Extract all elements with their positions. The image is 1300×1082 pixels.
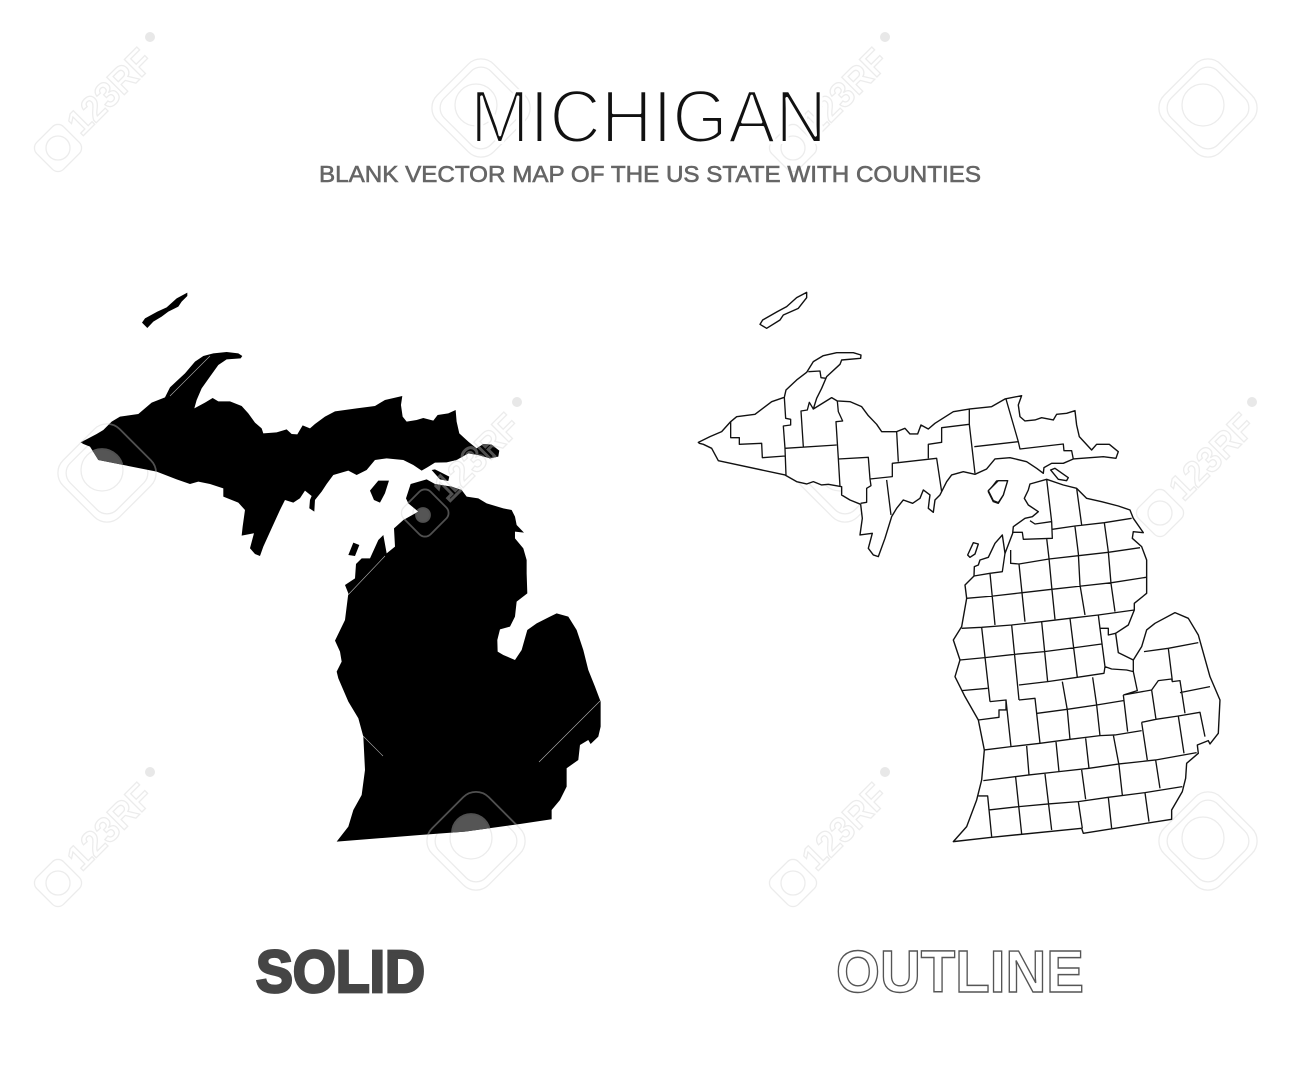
watermark over solid map [80, 356, 600, 834]
watermark over solid map: 123RF [425, 405, 528, 508]
solid map of Michigan [81, 293, 601, 842]
label: outline: OUTLINE [836, 939, 1084, 1005]
outline map of Michigan with counties [698, 292, 1220, 842]
subtitle: BLANK VECTOR MAP OF THE US STATE WITH COUNTIES [319, 161, 981, 187]
watermark layer [31, 32, 1265, 910]
outline: upper peninsula counties and islands [698, 292, 1118, 557]
watermark layer: 123RF [793, 40, 896, 143]
solid: lower peninsula [335, 479, 601, 842]
watermark layer: 123RF [58, 40, 161, 143]
watermark layer: 123RF [1160, 405, 1263, 508]
outline: lower peninsula counties [953, 479, 1220, 842]
watermark layer: 123RF [425, 405, 528, 508]
solid: upper peninsula and islands [81, 293, 499, 556]
label: solid: SOLID [256, 939, 425, 1005]
watermark layer: 123RF [793, 775, 896, 878]
title: MICHIGAN [470, 74, 827, 158]
watermark layer: 123RF [58, 775, 161, 878]
